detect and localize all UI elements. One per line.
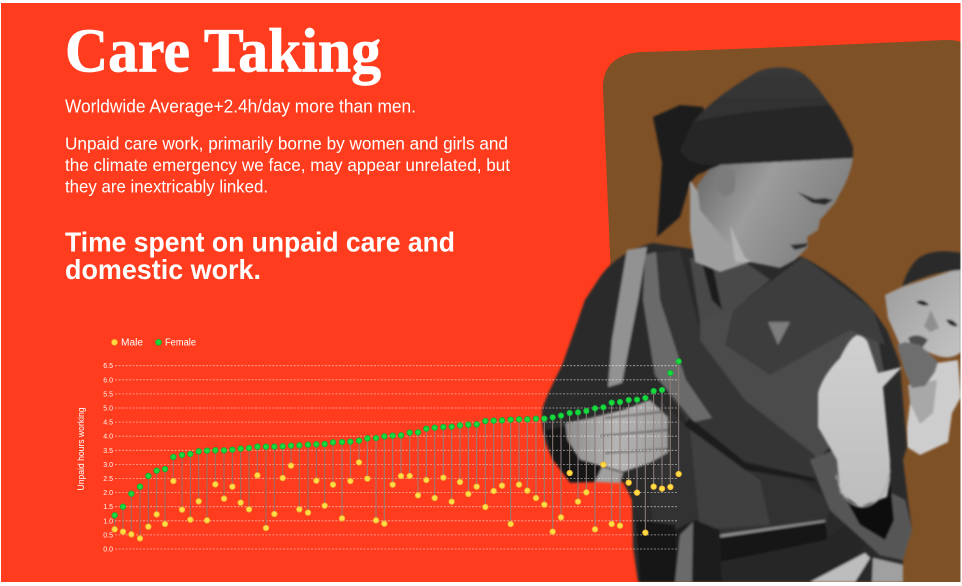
legend bbox=[112, 338, 196, 349]
photo: woman carrying child on brown shape bbox=[542, 40, 962, 582]
scarf crown bbox=[694, 66, 831, 121]
y axis labels: 3.5 bbox=[103, 448, 113, 455]
y axis labels: 6.5 bbox=[103, 363, 113, 370]
woman body bbox=[542, 243, 912, 582]
lower garment bbox=[674, 525, 675, 526]
y axis labels: 1.5 bbox=[103, 504, 113, 511]
chart series: countries 1 to 27 bbox=[115, 442, 333, 538]
chest panel bbox=[699, 310, 884, 458]
woman right hand bbox=[818, 335, 902, 507]
dumbbell chart bbox=[115, 361, 679, 549]
body paragraph: the climate emergency we face, may appear unrelated, but bbox=[65, 155, 510, 175]
child hand bbox=[897, 342, 938, 388]
child garment bbox=[907, 360, 961, 455]
woman head bbox=[653, 67, 853, 272]
lower right sleeve bbox=[810, 450, 912, 560]
child face bbox=[885, 268, 961, 357]
sleeve cuff bbox=[835, 480, 894, 540]
eye and mouth bbox=[790, 192, 833, 250]
y axis labels: 0.0 bbox=[103, 546, 113, 554]
body paragraph: they are inextricably linked. bbox=[65, 176, 268, 196]
y axis labels: 2.0 bbox=[103, 490, 113, 497]
lower cuff shadow bbox=[545, 426, 624, 482]
y axis title: Unpaid hours working bbox=[76, 408, 86, 490]
scarf band bbox=[680, 105, 853, 165]
child features bbox=[916, 301, 958, 326]
child arm bbox=[908, 380, 937, 424]
y axis labels: 4.0 bbox=[103, 434, 113, 441]
wrist bangle bbox=[836, 470, 890, 507]
hip wrap bbox=[810, 553, 870, 582]
legend: Female bbox=[165, 338, 196, 349]
chart series: countries 28 to 68 bbox=[342, 361, 679, 533]
belt knot bbox=[675, 520, 722, 582]
chart heading: domestic work. bbox=[65, 254, 261, 285]
y axis labels bbox=[103, 363, 113, 554]
y axis labels: 1.0 bbox=[103, 518, 113, 525]
title: Care Taking bbox=[65, 18, 381, 86]
sash bbox=[658, 252, 815, 477]
y axis labels: 2.5 bbox=[103, 476, 113, 483]
brown backdrop shape bbox=[603, 40, 962, 582]
y axis labels: 6.0 bbox=[103, 377, 113, 384]
lower dark folds bbox=[636, 520, 675, 582]
y axis labels: 5.5 bbox=[103, 391, 113, 398]
belt bbox=[720, 522, 827, 562]
garment silhouette bbox=[542, 243, 912, 582]
y axis labels: 5.0 bbox=[103, 406, 113, 412]
rope strap bbox=[608, 247, 647, 387]
ear bbox=[724, 176, 735, 195]
face bbox=[697, 158, 853, 268]
chart heading bbox=[65, 226, 455, 285]
neck bbox=[688, 180, 750, 273]
collar detail bbox=[690, 258, 770, 320]
body paragraph bbox=[65, 134, 510, 196]
y axis labels: 0.5 bbox=[103, 532, 113, 539]
child bbox=[885, 251, 961, 455]
subtitle: Worldwide Average+2.4h/day more than men. bbox=[65, 96, 416, 116]
scarf tail bbox=[653, 105, 720, 237]
child hat bbox=[902, 251, 961, 287]
chart heading: Time spent on unpaid care and bbox=[65, 226, 455, 258]
body paragraph: Unpaid care work, primarily borne by women and girls and bbox=[65, 134, 508, 154]
legend: Male bbox=[121, 338, 143, 349]
y axis labels: 3.0 bbox=[103, 462, 113, 469]
woman left hand bbox=[565, 400, 668, 472]
y axis labels: 4.5 bbox=[103, 420, 113, 427]
